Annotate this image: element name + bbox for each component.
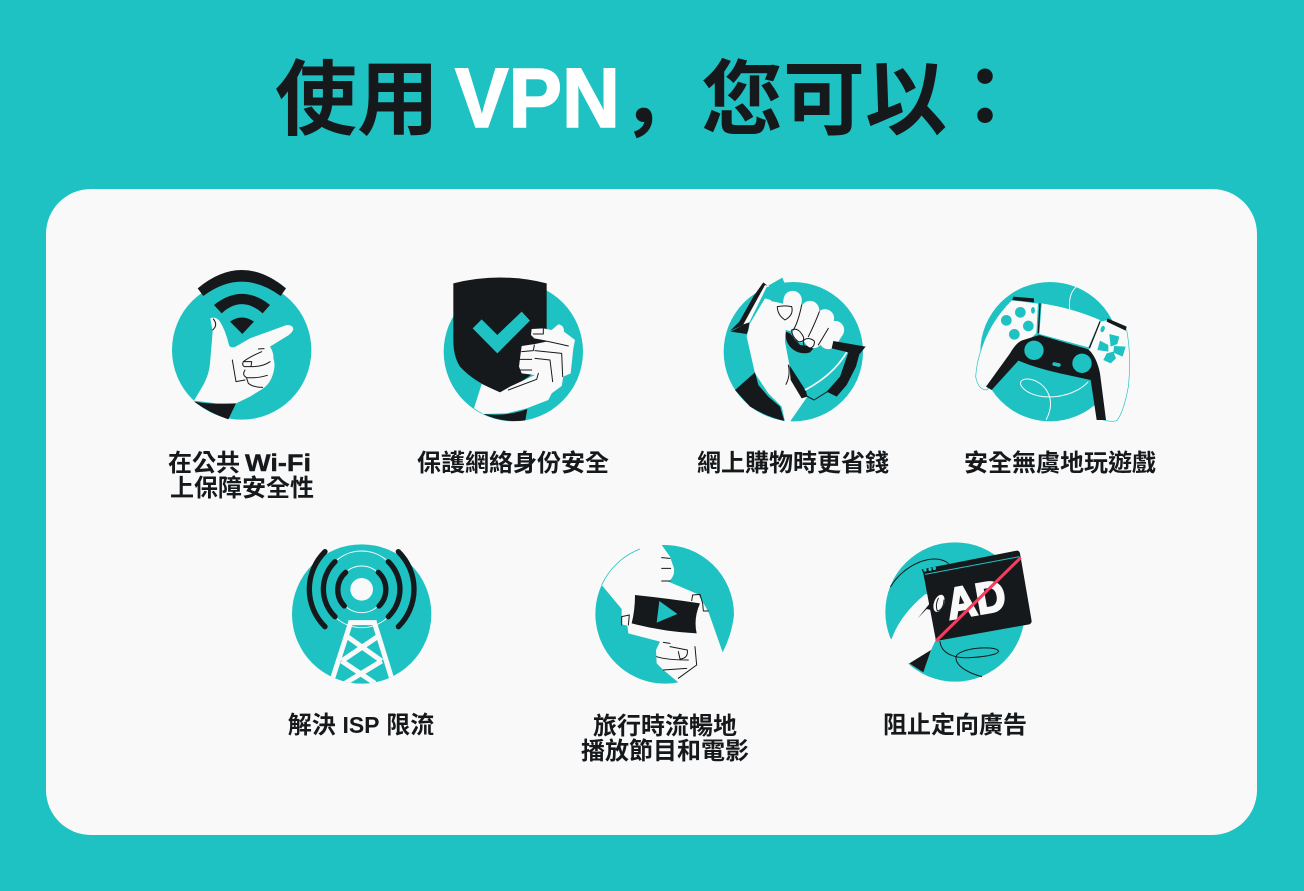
label: streaming	[581, 713, 749, 765]
title: VPN	[455, 51, 620, 145]
label: shopping: 網上購物時更省錢	[697, 450, 889, 477]
icon: ad blocker	[880, 542, 1032, 682]
title: ：	[944, 53, 1026, 144]
label: identity: 保護網絡身份安全	[417, 450, 609, 477]
label: streaming: 播放節目和電影	[581, 738, 749, 765]
title	[275, 51, 1026, 146]
label: wifi: 在公共	[168, 450, 240, 477]
icon: wifi hand	[172, 270, 311, 420]
panel: white card	[46, 189, 1257, 835]
icon: ad blocker: AD	[943, 571, 1010, 630]
icon: shield hand	[444, 277, 583, 421]
label: ad blocking: 阻止定向廣告	[883, 712, 1027, 739]
label: streaming: 旅行時流暢地	[593, 713, 737, 740]
icon: signal tower	[292, 544, 431, 684]
title: ，	[621, 55, 701, 144]
icon: video hands	[595, 545, 734, 684]
label: ISP throttling: 解決 ISP 限流	[288, 712, 434, 739]
title: 您可以	[701, 55, 947, 146]
label: gaming: 安全無虞地玩遊戲	[964, 449, 1156, 477]
icon: game controller	[976, 282, 1130, 421]
icon: shopping hand	[724, 278, 866, 422]
label: wifi: 上保障安全性	[170, 475, 314, 502]
title: 使用	[275, 55, 439, 146]
label: wifi: Wi-Fi	[245, 450, 311, 477]
label: wifi	[168, 450, 314, 502]
